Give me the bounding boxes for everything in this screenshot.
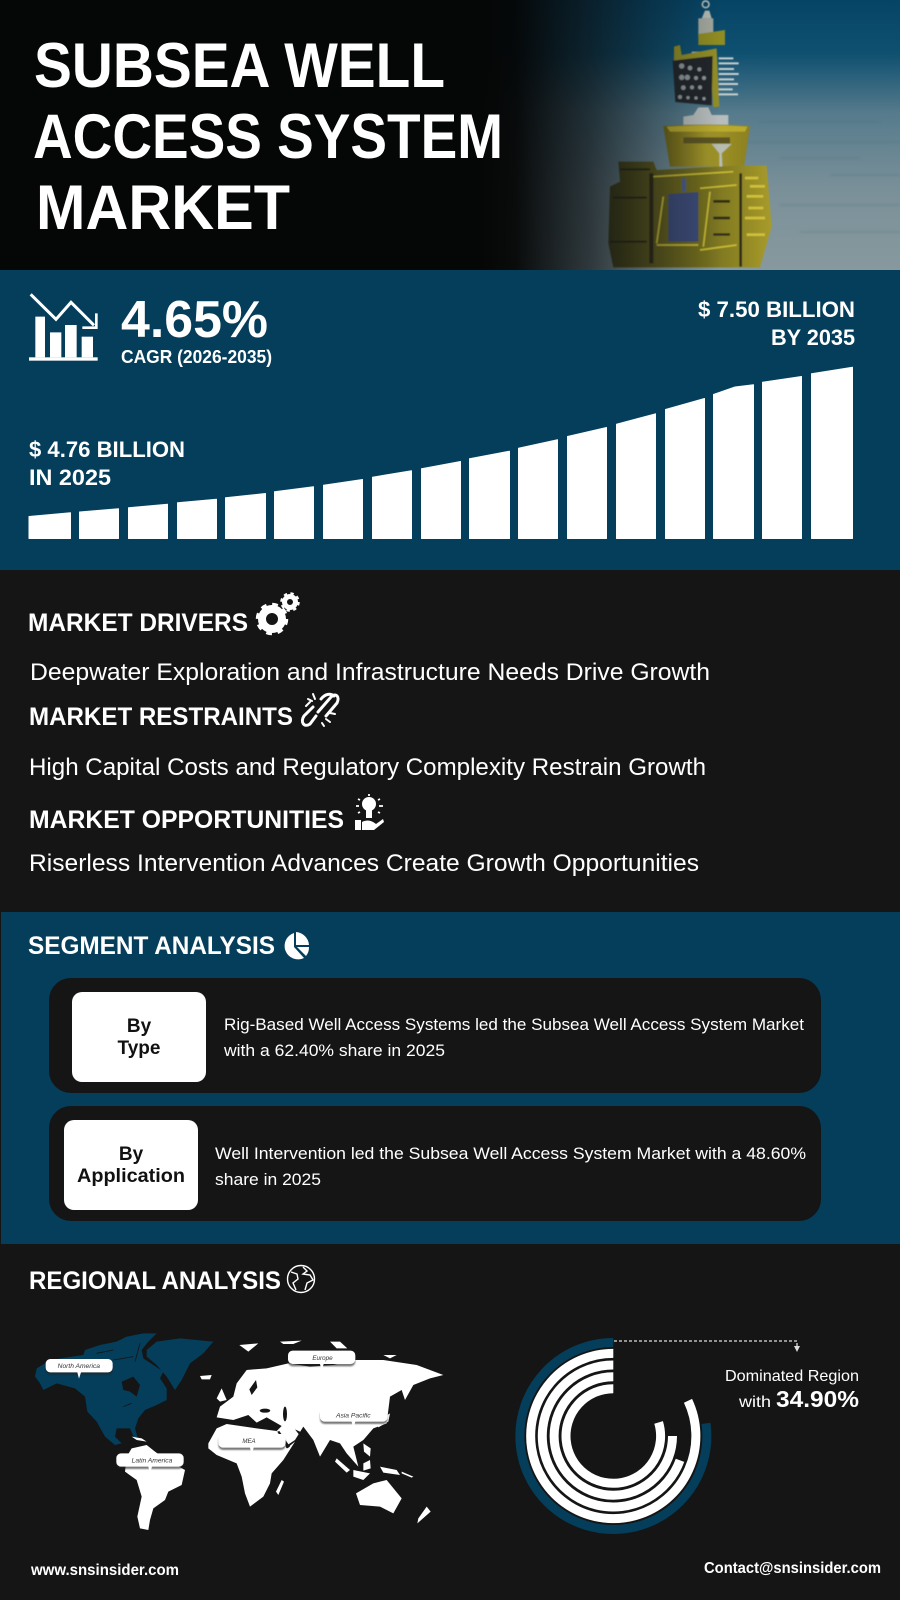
panel: header [0,0,900,270]
callout: dominated region [725,1368,859,1412]
opportunity text: Riserless Intervention Advances Create Growth Opportunities [29,850,699,877]
bar chart: growth 2025-2035 [29,367,852,538]
start value label [29,437,185,490]
footer: contact: Contact@snsinsider.com [704,1560,881,1577]
CAGR label: CAGR (2026-2035) [121,347,272,367]
panel: drivers, restraints, opportunities [28,594,710,877]
card: by application [49,1106,821,1221]
restraint text: High Capital Costs and Regulatory Complexity Restrain Growth [29,754,706,781]
title [33,31,503,243]
footer: website: www.snsinsider.com [30,1562,179,1579]
description: by application: share in 2025 [215,1170,321,1189]
title: MARKET [36,173,290,243]
title: ACCESS SYSTEM [33,102,503,172]
panel: market size [0,270,900,570]
world map [35,1333,443,1530]
label: MEA: MEA [242,1438,256,1445]
driver text: Deepwater Exploration and Infrastructure Needs Drive Growth [30,659,710,686]
callout: dominated region: with [738,1394,771,1411]
title: SUBSEA WELL [34,31,445,101]
label: Asia Pacific: Asia Pacific [335,1413,371,1420]
label box: by application: Application [77,1166,185,1187]
icon: pie chart [285,932,309,959]
description: by application [215,1144,806,1189]
label box: by type: Type [118,1038,160,1059]
label: Europe [288,1351,355,1371]
arrow: dashed leader line [614,1341,800,1352]
icon: growth chart [29,294,98,361]
callout: dominated region: 34.90% [776,1386,859,1412]
label: Europe: Europe [312,1355,333,1362]
panel: segment analysis [1,912,900,1244]
label: North America: North America [58,1363,100,1370]
icon: broken chain [302,694,338,726]
label box: by type: By [127,1016,152,1037]
label: Asia Pacific [320,1408,388,1429]
heading: regional analysis: REGIONAL ANALYSIS [29,1267,281,1295]
heading: segment analysis: SEGMENT ANALYSIS [28,932,275,960]
Rest of world continents [125,1341,443,1530]
label box: by application: By [119,1144,144,1165]
card: by type [49,978,821,1093]
North America highlighted [35,1333,213,1445]
label: North America [46,1359,113,1379]
icon: gears [258,594,298,634]
label: Latin America: Latin America [132,1458,173,1465]
label: MEA [218,1434,286,1455]
label box: by type [72,992,206,1082]
header photo: subsea equipment [450,0,900,270]
icon: idea hand [355,794,384,830]
radial chart: regional share [520,1342,707,1529]
panel: regional analysis [29,1266,859,1530]
label box: by application [64,1120,198,1210]
end value label: $ 7.50 BILLION [698,297,855,322]
heading: market restraints: MARKET RESTRAINTS [29,703,293,731]
description: by application: Well Intervention led the Subsea Well Access System Market with a 48.60% [215,1144,806,1163]
description: by type [223,1015,804,1060]
CAGR value: 4.65% [121,291,268,349]
description: by type: Rig-Based Well Access Systems led the Subsea Well Access System Market [224,1015,804,1034]
start value label: IN 2025 [29,465,111,490]
inland seas [249,1380,306,1448]
heading: market drivers: MARKET DRIVERS [28,609,248,637]
callout: dominated region: Dominated Region [725,1368,859,1385]
end value label [698,297,855,350]
end value label: BY 2035 [771,325,855,350]
start value label: $ 4.76 BILLION [29,437,185,462]
description: by type: with a 62.40% share in 2025 [223,1041,445,1060]
icon: globe [288,1266,314,1292]
label: Latin America [116,1453,184,1474]
heading: market opportunities: MARKET OPPORTUNITIES [29,806,344,834]
